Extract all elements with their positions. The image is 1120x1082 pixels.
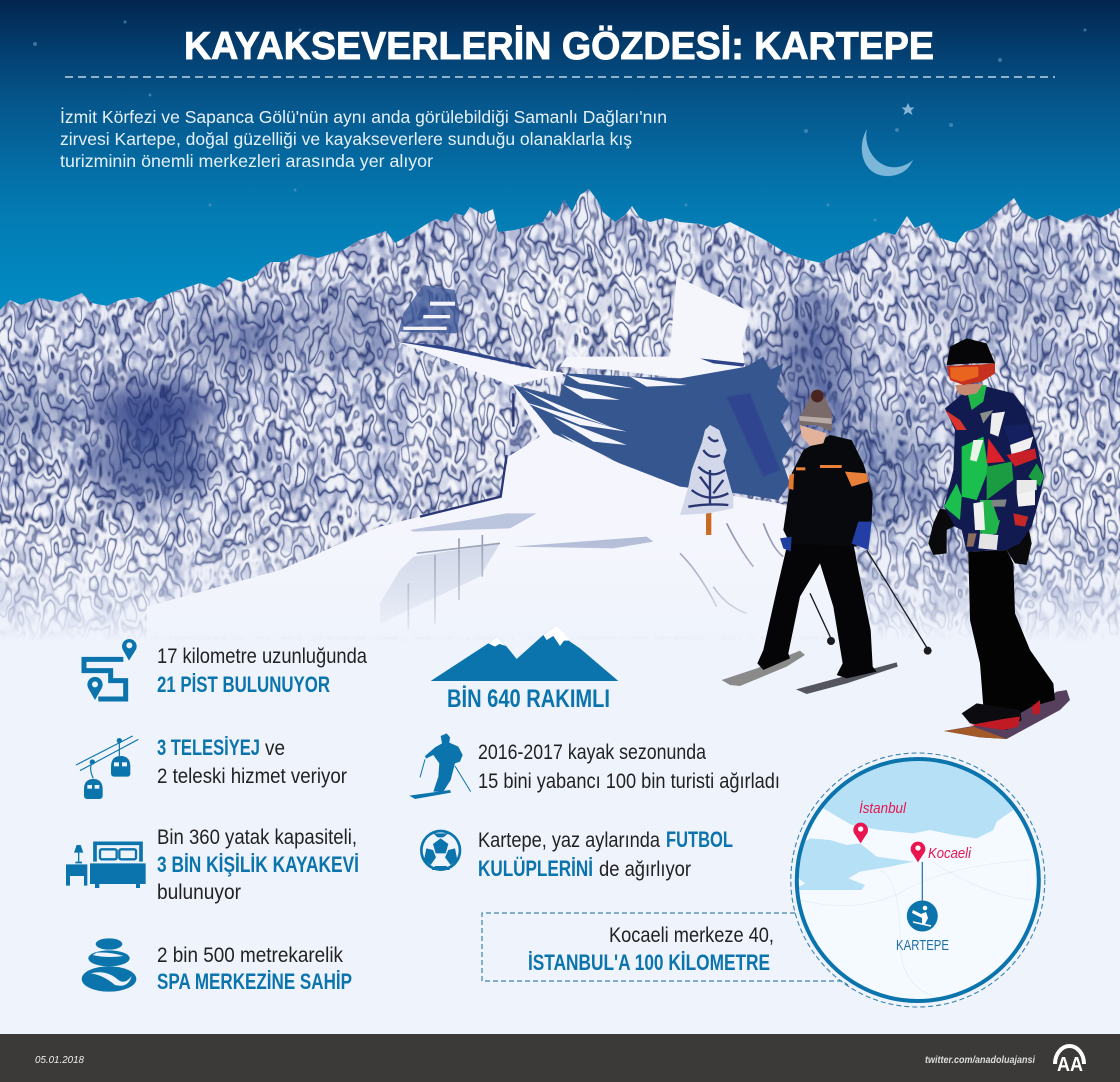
- item: altitude: BİN 640 RAKIMLI: [447, 685, 610, 713]
- man snowboarder: [928, 338, 1070, 739]
- title: KAYAKSEVERLERİN GÖZDESİ: KARTEPE: [184, 25, 934, 68]
- item: football: FUTBOL: [666, 827, 733, 852]
- item: spa: SPA MERKEZİNE SAHİP: [157, 969, 352, 994]
- callout: distances: Kocaeli merkeze 40,: [609, 924, 774, 947]
- map: İstanbul: [859, 800, 907, 817]
- snowy forest mountain: [0, 180, 1120, 650]
- item: football: [420, 827, 733, 881]
- icon: crescent moon: [862, 129, 913, 176]
- intro text: zirvesi Kartepe, doğal güzelliği ve kayakseverlere sunduğu olanaklarla kış: [60, 129, 632, 149]
- logo: [1055, 1046, 1084, 1076]
- item: altitude: [431, 625, 618, 713]
- item: lifts: 2 teleski hizmet veriyor: [157, 765, 347, 788]
- title divider: [65, 76, 1055, 78]
- map: Kocaeli: [928, 845, 972, 862]
- icon: cable cars: [76, 736, 138, 799]
- map: KARTEPE: [896, 937, 949, 954]
- boy skier: [722, 390, 932, 694]
- item: tourists: [409, 733, 780, 799]
- item: tourists: 2016-2017 kayak sezonunda: [478, 741, 706, 764]
- callout: distances: [482, 913, 848, 985]
- pin: İstanbul: [853, 823, 925, 862]
- icon: star: [902, 103, 914, 115]
- item: spa: 2 bin 500 metrekarelik: [157, 944, 343, 967]
- item: football: KULÜPLERİNİ: [478, 856, 593, 881]
- footer bar: [0, 1034, 1120, 1082]
- item: football: Kartepe, yaz aylarında: [478, 829, 660, 852]
- item: pistes: 21 PİST BULUNUYOR: [157, 672, 330, 697]
- callout: distances: İSTANBUL'A 100 KİLOMETRE: [528, 950, 770, 975]
- map: [791, 750, 1045, 1007]
- icon: football: [420, 830, 461, 871]
- night sky: [0, 0, 1120, 340]
- slope shadow: [513, 357, 793, 500]
- item: spa: [82, 938, 352, 994]
- snow fade into page: [0, 530, 1120, 642]
- icon: route with pins: [84, 639, 137, 700]
- small snowy tree: [680, 425, 733, 535]
- intro text: İzmit Körfezi ve Sapanca Gölü'nün aynı anda görülebildiği Samanlı Dağları'nın: [60, 107, 667, 127]
- logo: AA: [1057, 1054, 1083, 1076]
- item: pistes: 17 kilometre uzunluğunda: [157, 645, 367, 668]
- intro text: turizminin önemli merkezleri arasında yer alıyor: [60, 151, 433, 171]
- icon: bed and nightstand: [66, 843, 146, 888]
- icon: mountains: [431, 625, 618, 681]
- icon: stacked stones: [82, 938, 136, 992]
- skiers photo: [722, 338, 1070, 739]
- item: lodge beds: [66, 826, 359, 904]
- item: lodge beds: 3 BİN KİŞİLİK KAYAKEVİ: [157, 852, 359, 877]
- item: lifts: [76, 735, 347, 799]
- ski slope snow: [147, 277, 847, 637]
- item: lodge beds: Bin 360 yatak kapasiteli,: [157, 826, 357, 849]
- source: twitter.com/anadoluajansi: [925, 1054, 1036, 1066]
- item: lodge beds: bulunuyor: [157, 881, 241, 904]
- date: 05.01.2018: [35, 1054, 84, 1066]
- item: tourists: 15 bini yabancı 100 bin turisti ağırladı: [478, 770, 780, 793]
- icon: ski marker: [907, 900, 938, 932]
- item: lifts: 3 TELESİYEJ: [157, 735, 260, 760]
- item: pistes: [84, 639, 367, 700]
- icon: skier: [409, 733, 471, 799]
- item: lifts: ve: [265, 737, 285, 760]
- item: football: de ağırlıyor: [599, 858, 691, 881]
- intro text: [60, 107, 667, 171]
